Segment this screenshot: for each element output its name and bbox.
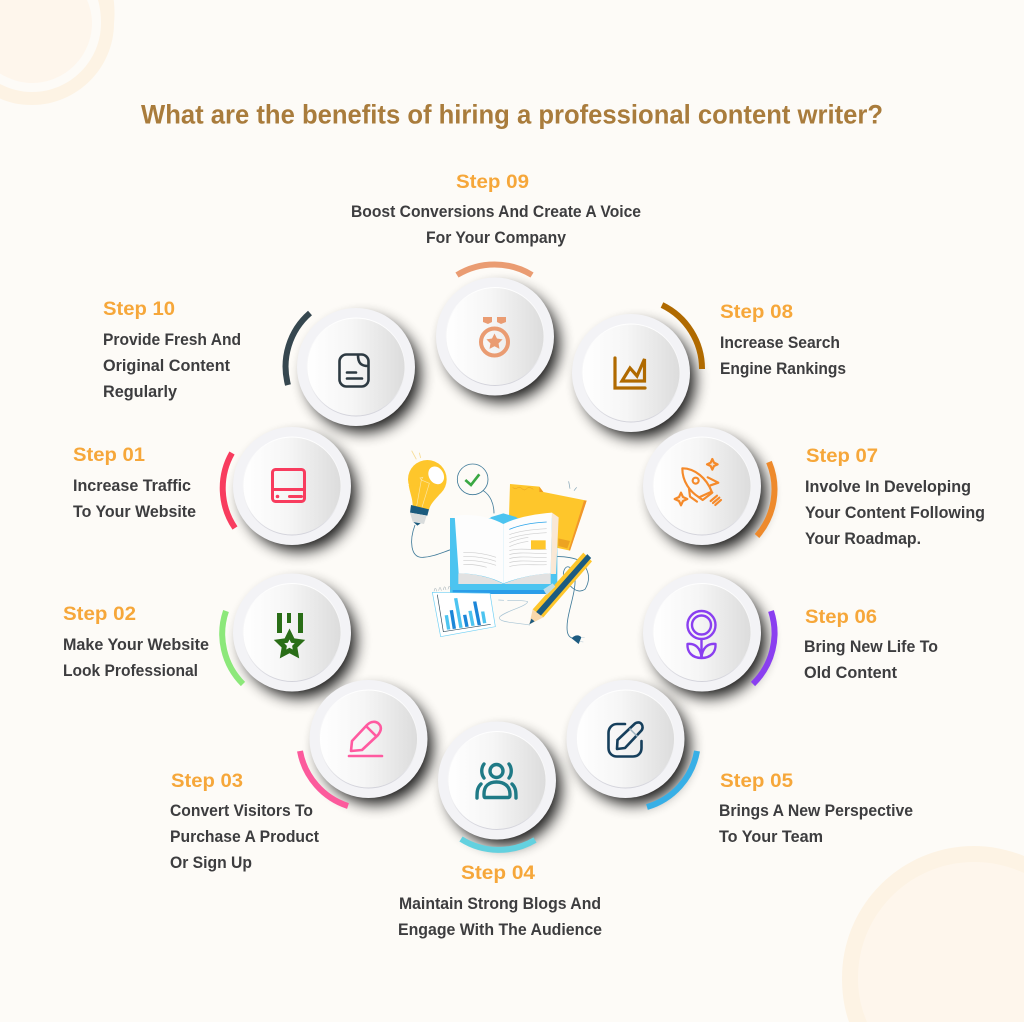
step 03 text: Convert Visitors To <box>170 802 313 820</box>
step 10 text: Regularly <box>103 383 177 401</box>
arc: step 07 <box>757 462 774 536</box>
decorative circle fill: bottom right <box>858 862 1024 1022</box>
step 05 text <box>719 802 913 846</box>
step 03 <box>170 680 432 872</box>
icon: pen <box>349 722 382 756</box>
step 06 label: Step 06 <box>805 607 877 628</box>
step 08 <box>572 302 846 438</box>
icon: pencil <box>529 553 592 624</box>
decorative circle: top left <box>0 0 115 105</box>
icon: edit square <box>608 722 643 756</box>
icon: folder <box>508 481 587 551</box>
step 10 label: Step 10 <box>103 299 175 320</box>
arc: step 09 <box>457 264 532 275</box>
step 07 text: Involve In Developing <box>805 478 971 496</box>
arc: step 05 <box>647 751 697 807</box>
step 10 <box>103 299 420 432</box>
title: What are the benefits of hiring a professional content writer? <box>141 100 883 130</box>
step 08 text: Increase Search <box>720 334 840 352</box>
step 04 <box>398 722 602 939</box>
decorative circle: bottom right <box>842 846 1024 1022</box>
step 02 label: Step 02 <box>63 604 136 625</box>
step 09 text: For Your Company <box>426 229 566 247</box>
step 01 text: Increase Traffic <box>73 477 191 495</box>
step 04 text: Maintain Strong Blogs And <box>399 895 601 913</box>
step 09 <box>351 172 641 402</box>
step 09 text: Boost Conversions And Create A Voice <box>351 203 641 221</box>
step 02 <box>63 574 356 698</box>
arc: step 02 <box>222 611 243 684</box>
icon: check mark badge <box>457 464 494 513</box>
step 09 label: Step 09 <box>456 172 529 193</box>
step 10 text <box>103 331 241 401</box>
icon: rocket <box>675 459 721 505</box>
step 02 text: Look Professional <box>63 662 198 680</box>
step 07 text: Your Roadmap. <box>805 530 921 548</box>
step 08 label: Step 08 <box>720 302 793 323</box>
step 07 label: Step 07 <box>806 446 878 467</box>
step 04 text: Engage With The Audience <box>398 921 602 939</box>
arc: step 10 <box>286 313 310 385</box>
step 06 text <box>804 638 938 682</box>
step 01 label: Step 01 <box>73 445 145 466</box>
step 05 text: Brings A New Perspective <box>719 802 913 820</box>
step 02 text <box>63 636 209 680</box>
icon: flower <box>687 611 716 658</box>
step 02 text: Make Your Website <box>63 636 209 654</box>
step 03 text: Purchase A Product <box>170 828 320 846</box>
step 03 text: Or Sign Up <box>170 854 252 872</box>
step 06 <box>643 574 938 698</box>
step 01 <box>73 427 356 551</box>
icon: line chart <box>615 358 645 388</box>
step 06 text: Old Content <box>804 664 898 682</box>
step 01 text <box>73 477 196 521</box>
arc: step 04 <box>461 839 535 850</box>
step 06 text: Bring New Life To <box>804 638 938 656</box>
icon: screen <box>272 470 304 502</box>
arc: step 08 <box>662 305 702 369</box>
icon: people <box>477 764 516 798</box>
arc: step 03 <box>300 751 348 806</box>
step 03 label: Step 03 <box>171 771 243 792</box>
step 05 label: Step 05 <box>720 771 793 792</box>
step 05 text: To Your Team <box>719 828 823 846</box>
decorative circle gap: top left <box>0 0 101 92</box>
step 08 text: Engine Rankings <box>720 360 846 378</box>
central illustration: book, bulb, folder, pencil and chart <box>408 451 592 644</box>
step 04 label: Step 04 <box>461 863 535 884</box>
step 08 text <box>720 334 846 378</box>
icon: medal <box>481 317 508 356</box>
step 10 text: Provide Fresh And <box>103 331 241 349</box>
step 09 text <box>351 203 641 247</box>
arc: step 06 <box>753 611 775 684</box>
step 07 <box>643 427 985 551</box>
step 03 text <box>170 802 320 872</box>
icon: chart notepad <box>432 586 495 637</box>
icon: award star <box>274 613 305 658</box>
step 10 text: Original Content <box>103 357 231 375</box>
icon: plug <box>572 635 585 644</box>
step 07 text <box>805 478 985 548</box>
step 04 text <box>398 895 602 939</box>
step 07 text: Your Content Following <box>805 504 985 522</box>
icon: open book <box>450 513 589 639</box>
step 05 <box>566 680 913 846</box>
icon: document note <box>340 354 368 386</box>
arc: step 01 <box>223 453 235 528</box>
icon: light bulb <box>408 451 452 557</box>
step 01 text: To Your Website <box>73 503 196 521</box>
decorative circle fill: top left <box>0 0 92 83</box>
scribble line <box>498 600 530 625</box>
